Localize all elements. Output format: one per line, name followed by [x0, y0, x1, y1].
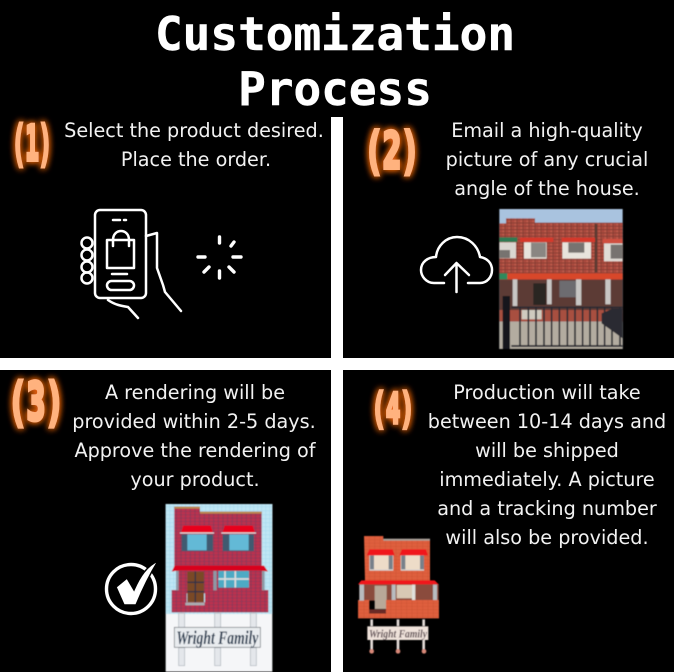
step 2 text: Email a high-quality: [451, 119, 643, 142]
step 4 text: between 10-14 days and: [428, 410, 666, 433]
step number 2: (2): [364, 122, 420, 180]
step 3 text: your product.: [130, 468, 260, 491]
step 4 text: immediately. A picture: [439, 468, 655, 491]
icon: check mark in circle: [106, 561, 158, 614]
house photograph: [499, 209, 623, 349]
step 1 text: [64, 119, 324, 171]
title: Customization: [155, 7, 515, 61]
upper windows: [180, 526, 256, 551]
panel: step 1: [12, 116, 324, 318]
step 4 text: [428, 381, 666, 549]
icon: hand holding phone with shopping bag: [82, 210, 181, 318]
panel: step 1: (1): [12, 116, 52, 172]
step number 3: (3): [8, 373, 64, 433]
title: Process: [238, 62, 432, 116]
title: [155, 7, 515, 116]
panel: step 3: [8, 373, 317, 672]
step 3 text: A rendering will be: [105, 381, 285, 404]
icon: cloud upload: [421, 237, 492, 292]
step 4 text: will be shipped: [475, 439, 619, 462]
step 2 text: picture of any crucial: [446, 148, 648, 171]
finished product photograph: Wright Family: [369, 627, 428, 641]
step 3 text: Approve the rendering of: [74, 439, 317, 462]
step 4 text: and a tracking number: [437, 497, 657, 520]
step 4 text: will also be provided.: [445, 526, 649, 549]
product rendering: Wright Family: [176, 628, 259, 649]
step 3 text: [72, 381, 317, 491]
step 2 text: [446, 119, 648, 200]
iron fence: [511, 307, 623, 346]
windows and awnings: [499, 237, 623, 261]
step 4 text: Production will take: [453, 381, 641, 404]
icon: loading spinner: [198, 237, 241, 278]
step 3 text: provided within 2-5 days.: [72, 410, 316, 433]
step number 4: (4): [372, 384, 414, 433]
product rendering: [166, 504, 272, 672]
panel: step 4: [358, 381, 666, 654]
finished product photograph: [358, 536, 439, 654]
step 1 text: Place the order.: [121, 148, 271, 171]
step 1 text: Select the product desired.: [64, 119, 324, 142]
step 2 text: angle of the house.: [454, 177, 640, 200]
panel: step 2: [364, 119, 648, 349]
